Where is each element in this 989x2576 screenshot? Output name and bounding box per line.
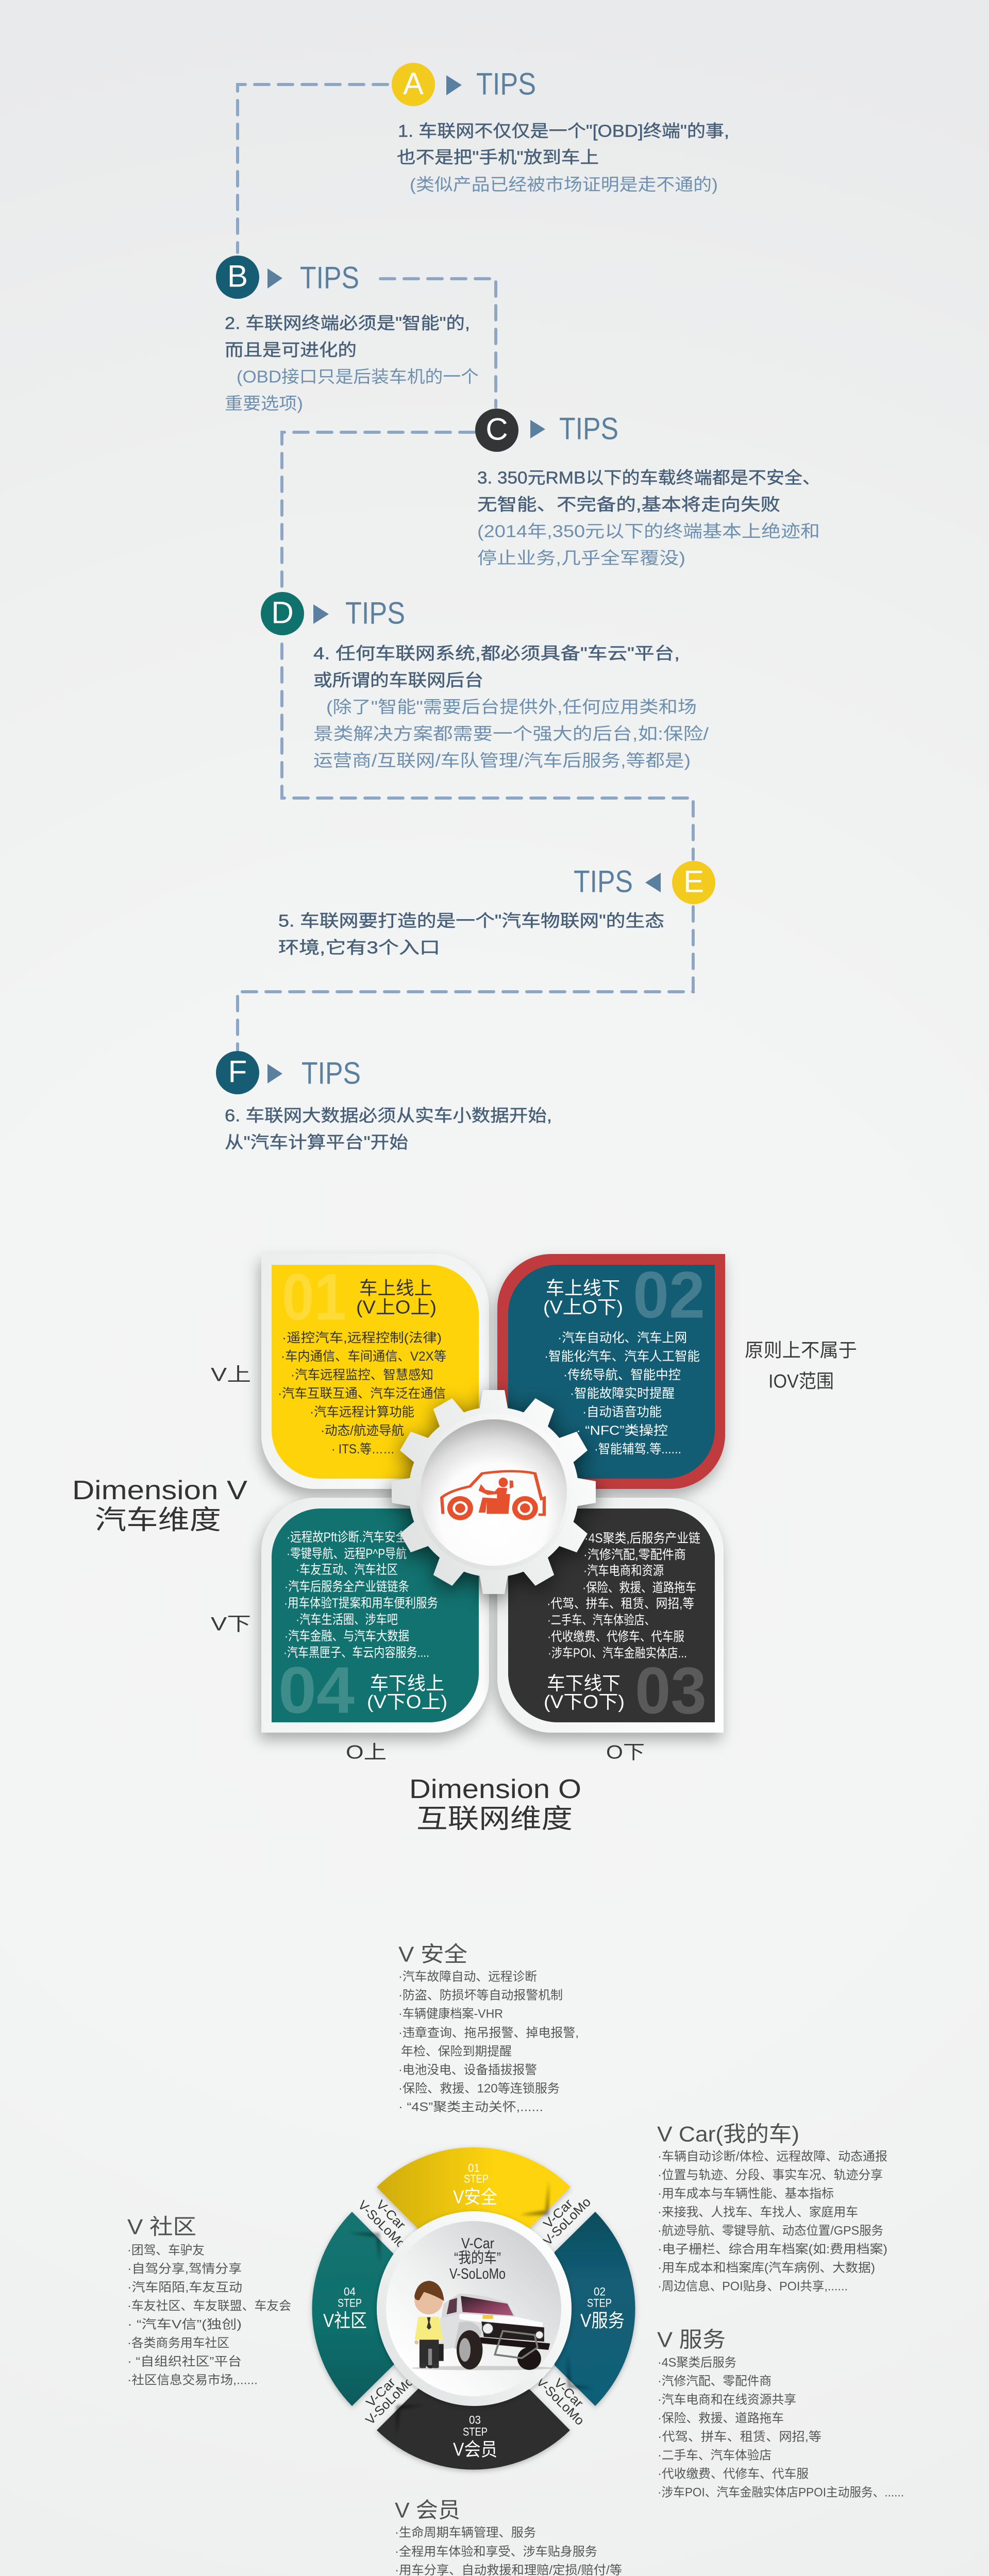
petal 02: V service: V服务 xyxy=(580,2310,625,2331)
panel 03: off vehicle offline: 车下线下 xyxy=(547,1672,621,1694)
tip D text: (除了"智能"需要后台提供外,任何应用类和场 xyxy=(326,698,697,716)
diagonal label lower right: V-SoLoMo xyxy=(533,2375,587,2428)
panel 01: on vehicle online: ·遥控汽车,远程控制(法律) xyxy=(282,1331,442,1345)
dimension O title: Dimension O xyxy=(409,1774,581,1804)
text block: V service: ·代收缴费、代修车、代车服 xyxy=(658,2467,809,2481)
text block: V community: ·车友社区、车友联盟、车友会 xyxy=(127,2299,291,2313)
diagonal label upper right: V-Car xyxy=(541,2196,576,2231)
axis label V up: V上 xyxy=(211,1364,251,1385)
panel 01: on vehicle online: 车上线上 xyxy=(359,1278,432,1298)
center disc: V-Car xyxy=(461,2235,494,2252)
petal 01: V safety: 01 xyxy=(468,2162,480,2174)
tip C: C xyxy=(485,412,508,446)
tip D text: 或所谓的车联网后台 xyxy=(313,671,483,689)
text block: V Car: ·用车成本与车辆性能、基本指标 xyxy=(658,2187,834,2201)
text block: V safety: ·车辆健康档案-VHR xyxy=(398,2007,503,2021)
axis label V down: V下 xyxy=(211,1614,251,1634)
panel 03: off vehicle offline: 03 xyxy=(635,1654,707,1728)
panel 01: on vehicle online: · ITS.等…… xyxy=(331,1442,395,1456)
text block: V service xyxy=(657,2328,904,2500)
panel 02: on vehicle offline: (V上O下) xyxy=(543,1296,623,1318)
petal 02: V service xyxy=(555,2212,635,2406)
tip B text: 而且是可进化的 xyxy=(225,340,357,360)
tip B text xyxy=(225,313,479,413)
dimension O title xyxy=(409,1774,581,1834)
tip F text: 从"汽车计算平台"开始 xyxy=(225,1132,408,1152)
panel 04: off vehicle online: ·远程故Pft诊断.汽车安全 xyxy=(287,1530,407,1545)
text block: V service: ·代驾、拼车、租赁、网招,等 xyxy=(658,2430,822,2444)
tip E: E xyxy=(683,865,704,899)
dimension V title xyxy=(72,1476,247,1535)
diagonal label lower left: V-Car xyxy=(363,2375,398,2410)
diagonal label upper left: V-SoLoMo xyxy=(355,2198,409,2251)
panel 04: off vehicle online: ·车友互动、汽车社区 xyxy=(296,1563,398,1577)
diagonal label upper right: V-SoLoMo xyxy=(540,2195,594,2248)
tip C text xyxy=(477,468,820,568)
text block: V service: ·4S聚类后服务 xyxy=(658,2355,736,2370)
text block: V Car: V Car(我的车) xyxy=(657,2122,799,2146)
petal 01: V safety xyxy=(377,2147,571,2229)
tip E text: 5. 车联网要打造的是一个"汽车物联网"的生态 xyxy=(278,911,664,930)
panel 02: on vehicle offline: 车上线下 xyxy=(546,1278,620,1298)
panel 03: off vehicle offline xyxy=(497,1498,724,1733)
panel 02: on vehicle offline: · “NFC”类操控 xyxy=(576,1423,668,1438)
text block: V community xyxy=(127,2214,291,2387)
text block: V Car: ·来接我、人找车、车找人、家庭用车 xyxy=(658,2205,858,2219)
tip A: A xyxy=(403,66,424,101)
panel 02: on vehicle offline: ·智能辅驾.等...... xyxy=(594,1442,681,1456)
panel 01: on vehicle online: ·动态/航迹导航 xyxy=(321,1423,404,1438)
tip D xyxy=(261,592,405,635)
text block: V community: ·汽车陌陌,车友互动 xyxy=(127,2280,242,2295)
text block: V Car: ·电子栅栏、综合用车档案(如:费用档案) xyxy=(658,2242,887,2257)
tip D text: 4. 任何车联网系统,都必须具备"车云"平台, xyxy=(313,644,680,663)
panel 03: off vehicle offline: (V下O下) xyxy=(544,1691,625,1713)
diagonal label lower right: V-Car xyxy=(551,2376,586,2411)
tip D: TIPS xyxy=(345,596,405,631)
tip C text: 停止业务,几乎全军覆没) xyxy=(477,548,685,568)
panel 03: off vehicle offline: ·4S聚类,后服务产业链 xyxy=(584,1531,700,1546)
panel 01: on vehicle online: ·汽车远程监控、智慧感知 xyxy=(291,1368,433,1382)
tip B text: (OBD接口只是后装车机的一个 xyxy=(237,367,479,386)
icon: car with driver xyxy=(442,1471,544,1520)
text block: V service: V 服务 xyxy=(657,2328,726,2351)
diagonal label lower left: V-SoLoMo xyxy=(363,2374,416,2428)
text block: V service: ·保险、救援、道路拖车 xyxy=(658,2411,784,2426)
panel 04: off vehicle online: 04 xyxy=(278,1654,355,1727)
tip D text: 运营商/互联网/车队管理/汽车后服务,等都是) xyxy=(313,751,691,770)
panel 02: on vehicle offline: ·自动语音功能 xyxy=(582,1405,662,1419)
center disc: “我的车” xyxy=(454,2249,501,2266)
text block: V Car: ·用车成本和档案库(汽车病例、大数据) xyxy=(658,2261,875,2275)
tip A text: 也不是把"手机"放到车上 xyxy=(397,147,599,167)
tip C text: (2014年,350元以下的终端基本上绝迹和 xyxy=(477,521,820,541)
panel 03: off vehicle offline: ·汽车电商和资源 xyxy=(583,1564,664,1578)
text block: V service: ·汽修汽配、零配件商 xyxy=(658,2374,772,2388)
panel 03: off vehicle offline: ·汽修汽配,零配件商 xyxy=(583,1548,686,1562)
panel 04: off vehicle online: (V下O上) xyxy=(367,1691,447,1713)
text block: V safety xyxy=(398,1942,579,2114)
text block: V service: ·二手车、汽车体验店 xyxy=(658,2448,772,2463)
panel 01: on vehicle online: (V上O上) xyxy=(356,1296,437,1318)
text block: V Car xyxy=(657,2122,887,2294)
panel 01: on vehicle online xyxy=(261,1253,489,1489)
panel 04: off vehicle online xyxy=(261,1498,489,1733)
panel 03: off vehicle offline: ·代收缴费、代修车、代车服 xyxy=(547,1630,684,1644)
text block: V Car: ·航迹导航、零键导航、动态位置/GPS服务 xyxy=(658,2224,883,2238)
tip A text: (类似产品已经被市场证明是走不通的) xyxy=(410,175,718,194)
petal 03: V member xyxy=(377,2388,570,2470)
panel 01: on vehicle online: 01 xyxy=(282,1260,346,1334)
petal 03: V member: STEP xyxy=(463,2426,488,2438)
tip D text: 景类解决方案都需要一个强大的后台,如:保险/ xyxy=(313,724,709,743)
panel 02: on vehicle offline: 02 xyxy=(633,1258,705,1332)
center disc: V-SoLoMo xyxy=(449,2266,506,2282)
text block: V Car: ·位置与轨迹、分段、事实车况、轨迹分享 xyxy=(658,2168,883,2182)
text block: V community: · “自组织社区”平台 xyxy=(127,2354,242,2369)
text block: V safety: V 安全 xyxy=(398,1942,467,1966)
tip D: D xyxy=(271,596,294,630)
panel 01: on vehicle online: ·车内通信、车间通信、V2X等 xyxy=(281,1349,446,1364)
tip F: TIPS xyxy=(301,1056,361,1090)
petal 03: V member: V会员 xyxy=(453,2439,497,2460)
dimension V title: 汽车维度 xyxy=(95,1505,221,1535)
text block: V safety: 年检、保险到期提醒 xyxy=(401,2044,512,2059)
text block: V member xyxy=(395,2498,643,2576)
text block: V community: V 社区 xyxy=(127,2214,196,2239)
panel 04: off vehicle online: ·用车体验T提案和用车便利服务 xyxy=(284,1596,438,1611)
tip D text xyxy=(313,644,709,770)
center disc xyxy=(377,2211,572,2406)
panel 04: off vehicle online: ·汽车黑匣子、车云内容服务.... xyxy=(283,1646,429,1660)
text block: V safety: · “4S”聚类主动关怀,...... xyxy=(398,2100,543,2114)
illustration: man with briefcase xyxy=(414,2281,444,2368)
panel 04: off vehicle online: ·零键导航、远程P^P导航 xyxy=(287,1547,407,1561)
text block: V community: ·各类商务用车社区 xyxy=(127,2336,229,2350)
side note: outside IOV: 原则上不属于 xyxy=(745,1340,857,1361)
axis label O down: O下 xyxy=(606,1741,645,1763)
petal 02: V service: STEP xyxy=(587,2297,612,2309)
tip E: TIPS xyxy=(574,865,633,899)
tip B xyxy=(216,256,359,299)
text block: V community: ·自驾分享,驾情分享 xyxy=(127,2262,242,2276)
text block: V service: ·汽车电商和在线资源共享 xyxy=(658,2393,796,2407)
text block: V safety: ·违章查询、拖吊报警、掉电报警, xyxy=(398,2026,579,2040)
tip A xyxy=(392,63,536,106)
text block: V community: ·社区信息交易市场,...... xyxy=(127,2373,258,2387)
petal 01: V safety: STEP xyxy=(464,2172,489,2185)
petal 04: V community: STEP xyxy=(338,2297,362,2309)
side note: outside IOV xyxy=(745,1340,857,1392)
panel 02: on vehicle offline: ·智能化汽车、汽车人工智能 xyxy=(544,1349,700,1364)
panel 04: off vehicle online: ·汽车金融、与汽车大数据 xyxy=(284,1629,409,1643)
tip A: TIPS xyxy=(476,67,536,101)
tip A text xyxy=(397,122,729,194)
panel 02: on vehicle offline: ·智能故障实时提醒 xyxy=(570,1386,675,1401)
panel 04: off vehicle online: 车下线上 xyxy=(370,1672,444,1694)
text block: V safety: ·防盗、防损坏等自动报警机制 xyxy=(398,1989,563,2002)
tip B text: 2. 车联网终端必须是"智能"的, xyxy=(225,313,470,333)
panel 01: on vehicle online: ·汽车互联互通、汽车泛在通信 xyxy=(278,1386,446,1401)
tip B: TIPS xyxy=(300,261,359,295)
gear hub xyxy=(387,1386,603,1602)
panel 02: on vehicle offline: ·传统导航、智能中控 xyxy=(563,1368,681,1382)
tip C text: 无智能、不完备的,基本将走向失败 xyxy=(477,495,780,514)
text block: V community: · “汽车V信”(独创) xyxy=(127,2317,242,2332)
tip F text xyxy=(225,1106,552,1152)
tip F: F xyxy=(228,1054,247,1089)
tip C text: 3. 350元RMB以下的车载终端都是不安全、 xyxy=(477,468,820,487)
side note: outside IOV: IOV范围 xyxy=(768,1370,834,1392)
diagonal label upper left: V-Car xyxy=(373,2197,408,2232)
tip B text: 重要选项) xyxy=(225,394,303,413)
text block: V member: V 会员 xyxy=(395,2498,460,2522)
petal 04: V community: V社区 xyxy=(323,2310,367,2331)
tip E text: 环境,它有3个入口 xyxy=(278,938,440,957)
tip C: TIPS xyxy=(559,411,618,446)
tip E xyxy=(574,861,715,904)
illustration: car xyxy=(412,2294,554,2370)
panel 03: off vehicle offline: ·代驾、拼车、租赁、网招,等 xyxy=(547,1597,694,1611)
panel 01: on vehicle online: ·汽车远程计算功能 xyxy=(310,1405,414,1419)
tip B: B xyxy=(227,259,248,294)
panel 04: off vehicle online: ·汽车后服务全产业链链条 xyxy=(284,1580,409,1594)
tip A text: 1. 车联网不仅仅是一个"[OBD]终端"的事, xyxy=(398,122,729,140)
text block: V Car: ·周边信息、POI贴身、POI共享,...... xyxy=(658,2279,848,2294)
text block: V Car: ·车辆自动诊断/体检、远程故障、动态通报 xyxy=(658,2149,887,2164)
tip F text: 6. 车联网大数据必须从实车小数据开始, xyxy=(225,1106,552,1125)
tips flow: dashed connector xyxy=(238,84,693,1050)
text block: V community: ·团驾、车驴友 xyxy=(127,2243,205,2258)
petal 04: V community: 04 xyxy=(344,2285,356,2298)
text block: V safety: ·汽车故障自动、远程诊断 xyxy=(398,1970,537,1984)
text block: V safety: ·保险、救援、120等连锁服务 xyxy=(398,2081,560,2096)
panel 03: off vehicle offline: ·二手车、汽车体验店、 xyxy=(547,1613,655,1628)
axis label O up: O上 xyxy=(346,1741,387,1763)
tip E text xyxy=(278,911,664,957)
petal 04: V community xyxy=(312,2212,394,2406)
dimension O title: 互联网维度 xyxy=(416,1804,573,1834)
text block: V safety: ·电池没电、设备插拔报警 xyxy=(398,2063,537,2077)
dimension V title: Dimension V xyxy=(72,1476,247,1505)
petal 02: V service: 02 xyxy=(594,2285,606,2298)
petal 01: V safety: V安全 xyxy=(453,2187,497,2207)
tip F xyxy=(216,1051,361,1094)
panel 03: off vehicle offline: ·保险、救援、道路拖车 xyxy=(582,1581,696,1595)
panel 02: on vehicle offline xyxy=(497,1254,725,1489)
text block: V member: ·生命周期车辆管理、服务 xyxy=(395,2526,536,2540)
tip C xyxy=(475,409,618,452)
panel 03: off vehicle offline: ·涉车POI、汽车金融实体店... xyxy=(548,1646,687,1660)
petal 03: V member: 03 xyxy=(469,2413,481,2427)
panel 04: off vehicle online: ·汽车生活圈、涉车吧 xyxy=(296,1613,398,1627)
text block: V member: ·全程用车体验和享受、涉车贴身服务 xyxy=(395,2545,597,2558)
panel 02: on vehicle offline: ·汽车自动化、汽车上网 xyxy=(558,1331,687,1345)
text block: V service: ·涉车POI、汽车金融实体店PPOI主动服务、...... xyxy=(658,2485,904,2500)
